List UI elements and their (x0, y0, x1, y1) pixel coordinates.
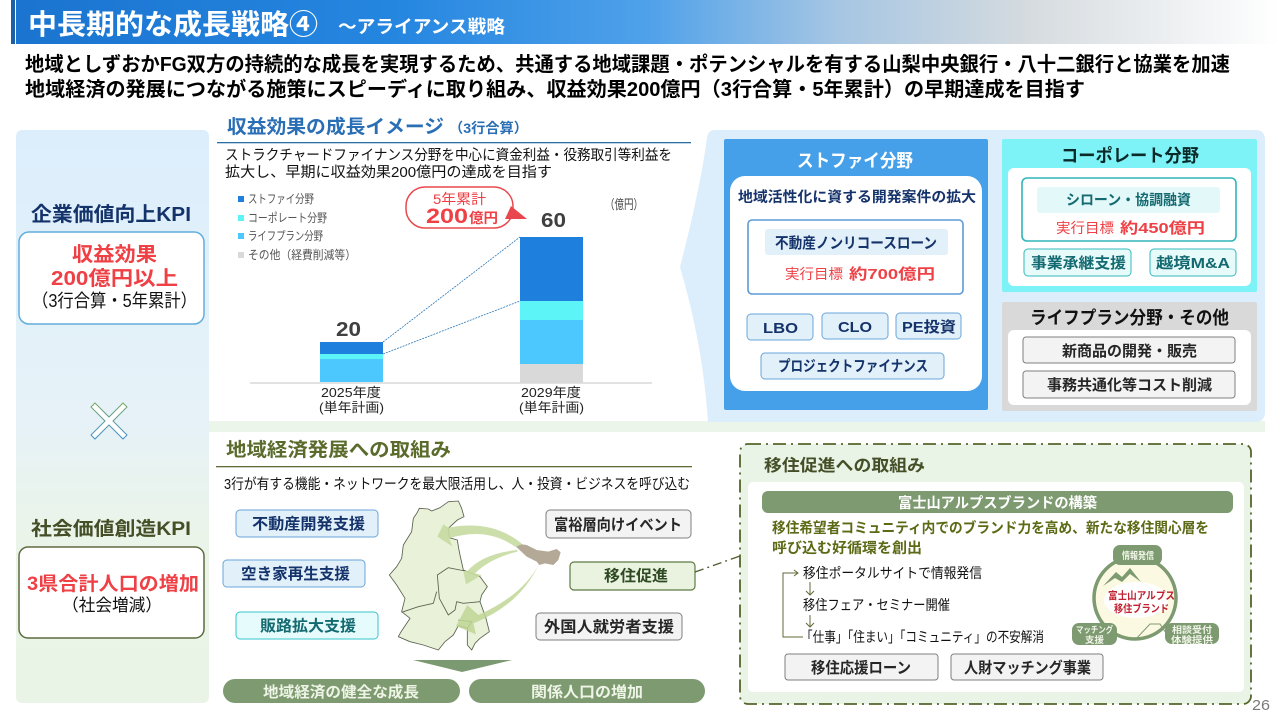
tag: project finance (761, 353, 944, 379)
lead text (25, 52, 1230, 101)
diagram: Fuji Alps brand cycle: 移住ブランド (1114, 602, 1169, 615)
tag: migration loan: 移住応援ローン (811, 658, 911, 677)
panel: structured finance (724, 139, 988, 410)
diagram: Fuji Alps brand cycle: 情報発信 (1122, 550, 1154, 562)
diagram: Fuji Alps brand cycle: マッチング (1076, 624, 1113, 635)
panel: structured finance: ストファイ分野 (797, 151, 913, 171)
tag: talent matching: 人財マッチング事業 (964, 658, 1091, 677)
tag: new products (1023, 337, 1235, 363)
icon: multiply cross (91, 403, 127, 439)
panel: corporate (1002, 139, 1257, 292)
connector: migration detail (695, 556, 740, 572)
tag: vacant house (223, 560, 365, 587)
panel: revenue image heading (217, 115, 691, 143)
KPI box: population: （社会増減） (62, 596, 162, 615)
stacked bar chart: (単年計画) (319, 400, 384, 415)
page number: 26 (1252, 697, 1270, 714)
stacked bar chart: 60 (541, 210, 566, 232)
KPI box: revenue effect: 収益効果 (72, 243, 157, 266)
callout: 5-year total: 200 (426, 205, 468, 228)
process list: 「仕事」「住まい」「コミュニティ」の不安解消 (801, 629, 1044, 645)
panel: KPI column (16, 130, 209, 703)
callout: 5-year total: 5年累計 (433, 191, 486, 207)
tag: PE investment: PE投資 (902, 318, 956, 336)
map: three prefectures with arrows (389, 501, 561, 650)
heading bar: Fuji Alps brand: 富士山アルプスブランドの構築 (898, 494, 1097, 512)
panel: corporate: コーポレート分野 (1061, 145, 1199, 166)
tag: sales channel (236, 612, 378, 639)
lead text: 地域としずおかFG双方の持続的な成長を実現するため、共通する地域課題・ポテンシャルを有する山梨中央銀行・八十二銀行と協業を加速 (25, 52, 1230, 76)
tag: cost reduction: 事務共通化等コスト削減 (1047, 376, 1212, 394)
tag: vacant house: 空き家再生支援 (241, 564, 350, 583)
target box: syndicated loan: シローン・協調融資 (1066, 191, 1191, 209)
header band (11, 0, 1280, 44)
outcome pill: related population (469, 679, 705, 703)
tag: migration promotion: 移住促進 (604, 566, 669, 585)
process list (783, 565, 1044, 645)
arrow: to Yamanashi (463, 550, 517, 584)
callout: 5-year total: 億円 (469, 210, 498, 226)
tag: business succession: 事業承継支援 (1031, 254, 1126, 272)
tag: CLO (822, 313, 888, 339)
target box: syndicated loan: 約450億円 (1120, 219, 1205, 237)
panel: business fields (680, 130, 1265, 422)
tag: talent matching (951, 654, 1103, 680)
stacked bar chart: 2029年度 (521, 385, 581, 400)
chart legend (238, 192, 356, 262)
heading bar: Fuji Alps brand (762, 491, 1233, 513)
description: revenue (225, 146, 672, 181)
KPI box: population (19, 547, 204, 638)
target box: syndicated loan (1022, 178, 1236, 241)
subtitle: ～アライアンス戦略 (338, 16, 505, 37)
title: 中長期的な成長戦略④ (28, 9, 318, 40)
diagram: Fuji Alps brand cycle (1072, 545, 1219, 645)
tag: wealthy events (546, 510, 691, 538)
diagram: Fuji Alps brand cycle: 支援 (1085, 634, 1104, 645)
tag: cross-border M&A (1150, 249, 1236, 276)
tag: migration promotion (570, 562, 695, 590)
tag: business succession (1024, 249, 1131, 276)
panel: revenue image heading: 収益効果の成長イメージ (227, 115, 444, 138)
unit label: （億円） (605, 197, 643, 212)
target box: non-recourse: 実行目標 (785, 266, 843, 282)
tag: project finance: プロジェクトファイナンス (778, 358, 928, 375)
tag: foreign workers: 外国人就労者支援 (544, 617, 675, 636)
stacked bar chart: 2025年度 (321, 385, 381, 400)
panel: migration promotion (740, 444, 1251, 704)
brand description (772, 519, 1209, 557)
KPI box: revenue effect: （3行合算・5年累計） (32, 291, 197, 311)
brand description: 呼び込む好循環を創出 (772, 539, 922, 557)
heading: corporate value KPI: 企業価値向上KPI (31, 203, 191, 226)
stacked bar chart (250, 210, 652, 415)
diagram: Fuji Alps brand cycle: 富士山アルプス (1108, 589, 1175, 602)
tag: LBO (747, 314, 813, 340)
target box: non-recourse: 不動産ノンリコースローン (775, 234, 937, 252)
description: revenue: ストラクチャードファイナンス分野を中心に資金利益・役務取引等利益を (225, 146, 672, 164)
KPI box: revenue effect: 200億円以上 (51, 267, 178, 290)
map: Tokyo (516, 544, 561, 565)
panel: life plan and other (1002, 302, 1257, 411)
description: revenue: 拡大し、早期に収益効果200億円の達成を目指す (225, 164, 552, 181)
outcome pill: healthy growth (223, 679, 460, 703)
arrow: to Nagano (437, 524, 523, 547)
brand description: 移住希望者コミュニティ内でのブランド力を高め、新たな移住関心層を (772, 519, 1209, 537)
panel: life plan and other: ライフプラン分野・その他 (1030, 308, 1229, 328)
bar: 2029 (520, 237, 583, 383)
chart legend: ライフプラン分野 (248, 229, 323, 243)
chart legend: その他（経費削減等） (248, 247, 356, 262)
callout: 5-year total (406, 187, 527, 228)
stacked bar chart: (単年計画) (519, 400, 584, 415)
target box: non-recourse (748, 220, 963, 294)
tag: new products: 新商品の開発・販売 (1062, 342, 1197, 360)
tag: sales channel: 販路拡大支援 (260, 616, 357, 635)
tag: CLO: CLO (838, 319, 872, 336)
tag: PE investment (896, 313, 961, 339)
panel: migration promotion: 移住促進への取組み (764, 456, 925, 475)
tag: migration loan (785, 654, 938, 680)
lead text: 地域経済の発展につながる施策にスピーディに取り組み、収益効果200億円（3行合算・5年累計）の早期達成を目指す (25, 77, 1085, 101)
panel: structured finance: 地域活性化に資する開発案件の拡大 (738, 188, 977, 206)
diagram: Fuji Alps brand cycle: 相談受付 (1172, 624, 1212, 635)
chart legend: コーポレート分野 (248, 211, 327, 225)
stacked bar chart: 20 (336, 319, 361, 341)
heading: social value KPI: 社会価値創造KPI (31, 518, 191, 540)
tag: real estate development (236, 510, 378, 537)
panel: revenue image heading: （3行合算） (449, 120, 528, 136)
tag: cost reduction (1023, 371, 1235, 398)
arrow: down to outcomes (413, 660, 512, 672)
tag: cross-border M&A: 越境M&A (1156, 255, 1230, 272)
tag: wealthy events: 富裕層向けイベント (554, 516, 682, 534)
divider band: green (209, 421, 1265, 432)
outcome pill: related population: 関係人口の増加 (531, 683, 643, 701)
tag: foreign workers (536, 613, 682, 640)
tag: real estate development: 不動産開発支援 (252, 515, 366, 533)
outcome pill: healthy growth: 地域経済の健全な成長 (263, 683, 419, 701)
process list: 移住ポータルサイトで情報発信 (803, 565, 982, 581)
process list: 移住フェア・セミナー開催 (803, 597, 950, 613)
bar: 2025 (320, 342, 383, 382)
description: regional economy: 3行が有する機能・ネットワークを最大限活用し、人・投資・ビジネスを呼び込む (224, 476, 690, 493)
chart legend: ストファイ分野 (248, 192, 314, 206)
target box: non-recourse: 約700億円 (849, 265, 935, 283)
KPI box: revenue effect (19, 232, 204, 324)
heading: regional economy: 地域経済発展への取組み (226, 439, 451, 461)
diagram: Fuji Alps brand cycle: 体験提供 (1171, 634, 1213, 645)
KPI box: population: 3県合計人口の増加 (27, 572, 199, 595)
tag: LBO: LBO (763, 320, 798, 337)
target box: syndicated loan: 実行目標 (1056, 220, 1114, 236)
arrow: to Shizuoka (456, 563, 539, 634)
